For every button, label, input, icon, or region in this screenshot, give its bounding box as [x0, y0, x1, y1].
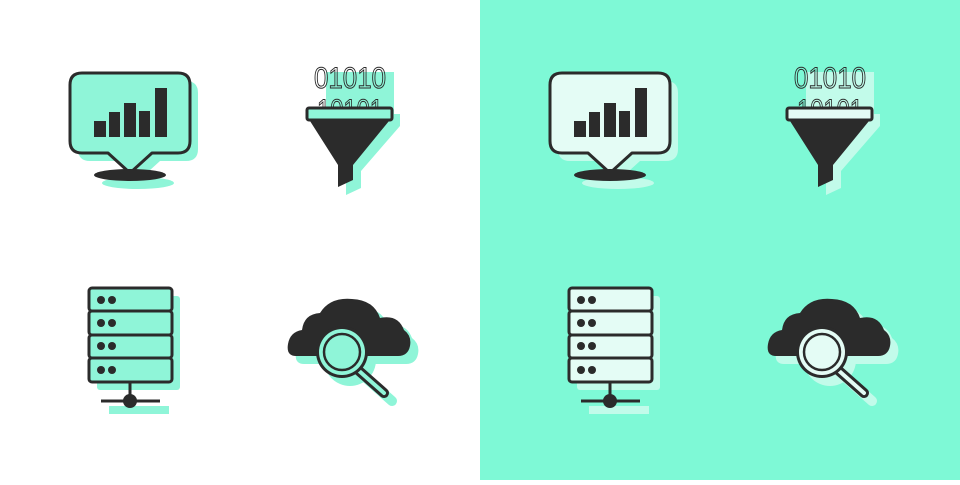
- icon: data funnel (right): [787, 62, 880, 195]
- left background panel: [0, 0, 480, 480]
- icon: cloud search (left): [288, 299, 418, 401]
- icon: chat bubble with bar chart (right): [550, 73, 678, 189]
- icon: server (left): [89, 288, 180, 414]
- icon: server (right): [569, 288, 660, 414]
- right background panel: [480, 0, 960, 480]
- icon: data funnel (left): [307, 62, 400, 195]
- icon: chat bubble with bar chart (left): [70, 73, 198, 189]
- icon: cloud search (right): [768, 299, 898, 401]
